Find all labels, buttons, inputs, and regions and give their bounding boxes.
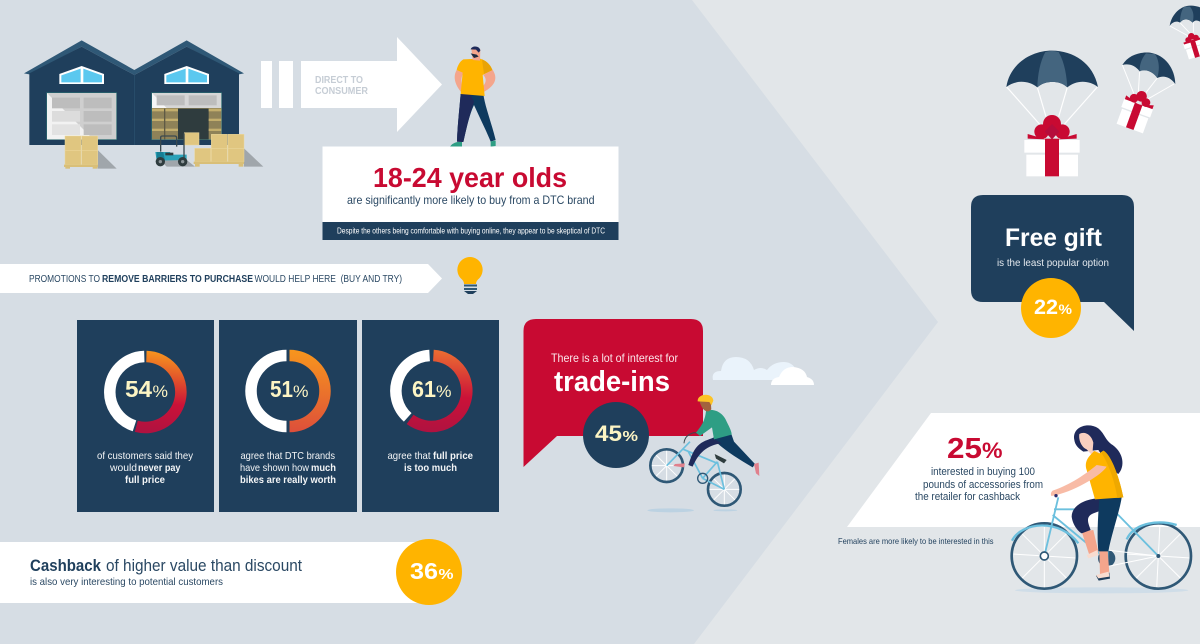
panel: 54% never pay full price: [77, 320, 214, 512]
banner: promotions: REMOVE BARRIERS TO PURCHASE: [102, 274, 253, 285]
icon: small parachute gift: [1170, 6, 1200, 60]
caption: full price: [125, 474, 165, 486]
panel: 61% full price too much: [362, 320, 499, 512]
badge: 36%: %: [438, 566, 454, 583]
caption: of customers said they: [97, 450, 194, 462]
icon: warehouse with forklift and boxes: [24, 40, 263, 169]
badge: 36%: [396, 539, 462, 605]
icon: woman riding bicycle: [1012, 425, 1191, 593]
caption: agree that DTC brands: [240, 450, 335, 462]
panel: cashback: of higher value than discount: [106, 556, 302, 575]
panel: 25% accessories: %: [982, 438, 1002, 463]
callout: trade-ins: There is a lot of interest for: [551, 351, 678, 365]
donut: 51%: [251, 356, 325, 426]
background chevron: [0, 0, 938, 644]
caption: much: [311, 462, 336, 474]
panel: 18-24 year olds: [322, 146, 618, 240]
caption: full price: [433, 450, 473, 462]
caption: [97, 450, 194, 486]
caption: [388, 450, 473, 474]
badge: 45%: %: [622, 428, 638, 445]
donut: 54%: [110, 356, 181, 427]
callout: trade-ins: [524, 319, 703, 468]
badge: 45%: 45: [595, 421, 622, 446]
callout: free gift: is the least popular option: [997, 257, 1109, 269]
donut: 61%: [396, 356, 467, 426]
arrow: direct to consumer: CONSUMER: [315, 86, 369, 97]
value: 61%: 61: [412, 376, 436, 402]
icon: light bulb: [457, 257, 483, 294]
caption: is too much: [404, 462, 457, 474]
panel: 25% accessories: the retailer for cashback: [915, 491, 1020, 503]
banner: promotions: PROMOTIONS TO: [29, 274, 100, 285]
panel: 18-24 year olds: are significantly more likely to buy from a DTC brand: [347, 193, 594, 207]
value: 61%: %: [436, 382, 452, 401]
value: 54%: 54: [125, 376, 152, 402]
panel: 18-24 year olds: 18-24 year olds: [373, 162, 567, 193]
callout: free gift: Free gift: [1005, 224, 1103, 252]
badge: 45%: [583, 402, 649, 468]
panel: cashback: is also very interesting to potential customers: [30, 576, 223, 588]
badge: 36%: 36: [410, 558, 438, 584]
badge: 22%: %: [1058, 301, 1073, 317]
icon: standing man: [450, 46, 496, 147]
badge: 22%: 22: [1034, 296, 1058, 319]
panel: 25% accessories: [847, 413, 1200, 527]
icon: cyclist doing a wheelie: [647, 395, 759, 512]
value: 54%: [125, 376, 168, 402]
value: 51%: [270, 376, 308, 402]
arrow: direct to consumer: DIRECT TO: [315, 75, 363, 86]
arrow: direct to consumer: [261, 37, 442, 132]
banner: promotions: WOULD HELP HERE (BUY AND TRY): [254, 274, 402, 285]
caption: [240, 450, 336, 486]
caption: would: [109, 462, 137, 474]
value: 51%: 51: [270, 376, 293, 402]
caption: agree that: [388, 450, 431, 462]
panel: 25% accessories: 25: [947, 433, 982, 465]
value: 54%: %: [152, 382, 168, 401]
panel: cashback: Cashback: [30, 556, 101, 575]
caption: have shown how: [240, 462, 309, 474]
icon: large parachute gift: [1006, 51, 1098, 176]
panel: cashback: [0, 539, 462, 605]
value: 61%: [412, 376, 452, 402]
icon: clouds: [713, 357, 814, 385]
panel: 25% accessories: interested in buying 100: [931, 466, 1035, 478]
panel: 18-24 year olds: Despite the others being comfortable with buying online, they appear to be skeptical of DTC: [337, 226, 605, 236]
caption: never pay: [138, 462, 181, 474]
banner: promotions: [0, 264, 442, 293]
badge: 22%: [1021, 278, 1081, 338]
panel: 51% agree DTC brands: [219, 320, 357, 512]
note: females: Females are more likely to be interested in this: [838, 536, 994, 546]
callout: free gift: [971, 195, 1134, 338]
callout: trade-ins: trade-ins: [554, 366, 670, 398]
icon: middle parachute gift: [1115, 52, 1175, 134]
caption: bikes are really worth: [240, 474, 336, 486]
panel: 25% accessories: pounds of accessories from: [923, 479, 1043, 491]
value: 51%: %: [293, 382, 308, 401]
